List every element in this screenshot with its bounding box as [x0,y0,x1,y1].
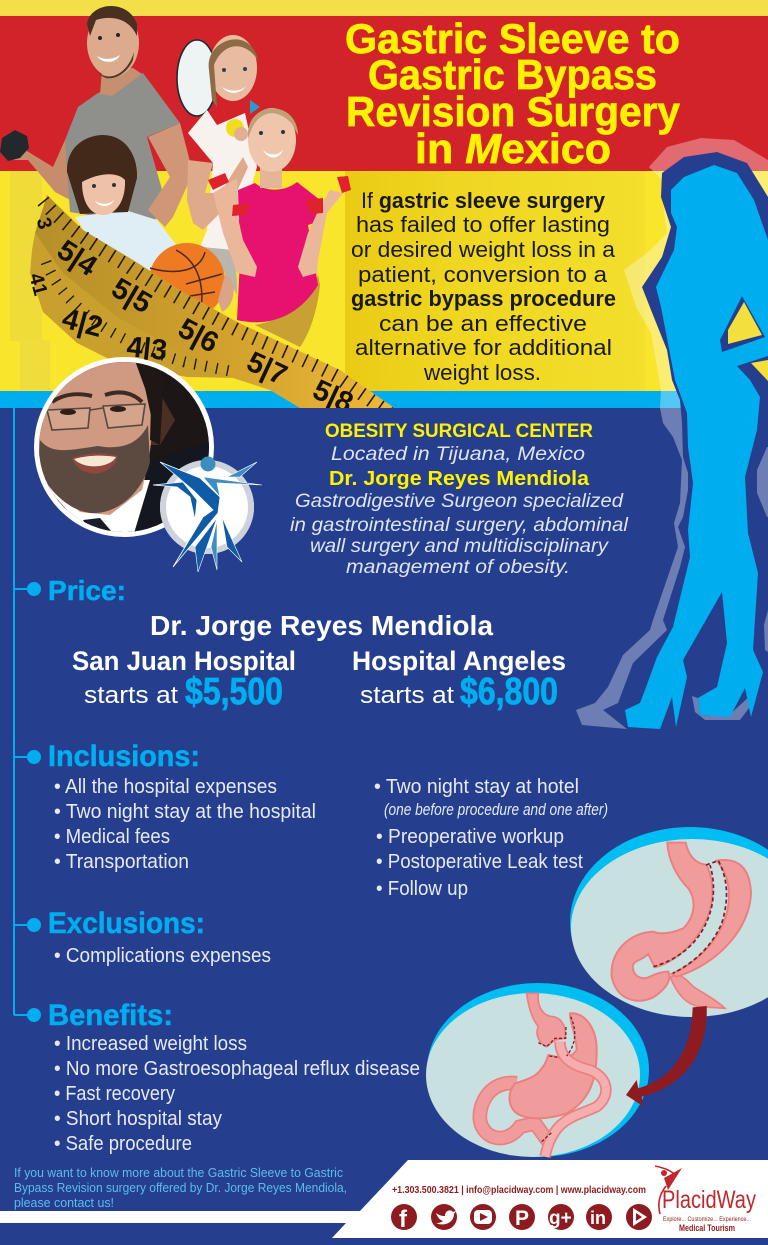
text block: contact prompt: Bypass Revision surgery offered by Dr. Jorge Reyes Mendiola, [14,1180,347,1195]
title: Gastric Bypass [368,51,657,98]
section: inclusions: • All the hospital expenses [54,776,277,798]
body text: intro paragraph: alternative for additional [355,335,612,360]
section: price: Price: [48,575,126,606]
section: benefits: • Short hospital stay [54,1108,222,1130]
section: price: $6,800 [460,671,558,713]
boy [66,135,176,272]
icons: social media [391,1204,652,1233]
section: benefits: • No more Gastroesophageal reflux disease [54,1058,420,1080]
section: inclusions: (one before procedure and one after) [384,800,608,819]
section: price: $5,500 [185,671,283,713]
icon: play [626,1204,652,1230]
illustration: woman silhouette [576,138,768,729]
section: benefits: • Safe procedure [54,1133,192,1155]
title: Revision Surgery [346,88,681,135]
icon: google plus: g+ [549,1208,572,1229]
icon: twitter [431,1204,457,1230]
text block: surgical center and surgeon: OBESITY SURGICAL CENTER [325,421,593,442]
body text: intro paragraph: If gastric sleeve surgery [361,188,606,213]
section: inclusions: Inclusions: [48,740,200,773]
tape lower band [30,234,233,378]
measuring tape: 5|4 [51,234,103,283]
body text: intro paragraph: weight loss. [423,360,541,385]
text block: surgical center and surgeon: wall surgery and multidisciplinary [310,536,610,557]
panel: white footer band [0,1160,768,1238]
text block: surgical center and surgeon: Dr. Jorge Reyes Mendiola [329,468,590,490]
timeline line [13,408,15,1016]
logo: PlacidWay [655,1166,756,1233]
illustration: gastric sleeve stomach [570,827,768,1017]
body text: intro paragraph: patient, conversion to a [358,262,608,287]
icon: linkedin: in [590,1208,606,1228]
text block: contact prompt [14,1165,347,1210]
title: in Mexico [415,125,611,172]
measuring tape: 4|3 [125,331,169,367]
section: price: Hospital Angeles [352,646,566,676]
icon: facebook: f [399,1206,408,1233]
man [0,6,193,227]
logo: PlacidWay: Explore... Customize... Experience... [663,1216,751,1223]
text block: contact prompt: If you want to know more about the Gastric Sleeve to Gastric [14,1165,343,1180]
silhouette shadow: right hip [692,447,768,720]
arrow: sleeve to bypass [626,1006,707,1106]
section: benefits: • Increased weight loss [54,1033,247,1055]
section: price: starts at [84,682,178,709]
section: inclusions: • Two night stay at hotel [374,776,579,798]
panel: navy background [0,408,768,1245]
section: price [14,575,566,713]
measuring tape: 5|6 [173,312,224,360]
logo: PlacidWay: Medical Tourism [679,1223,735,1233]
section: inclusions: • Follow up [376,878,468,900]
girl [208,108,351,322]
tape upper band [35,195,393,408]
text block: surgical center and surgeon: Gastrodigestive Surgeon specialized [295,491,625,512]
text: contact details: +1.303.500.3821 | info@placidway.com | www.placidway.com [392,1184,646,1196]
icon: linkedin [586,1204,612,1230]
icon: youtube [470,1204,496,1230]
doctor photo [34,357,214,537]
text block: surgical center and surgeon [290,421,629,578]
tape back band [255,275,320,347]
panel: cyan stripe [0,391,768,408]
silhouette outline [642,152,768,423]
icon: pinterest [509,1204,535,1230]
logo: obesity surgical center [153,456,262,572]
text block: surgical center and surgeon: in gastrointestinal surgery, abdominal [290,515,629,536]
illustration: family with measuring tape [0,6,393,420]
illustration: gastric bypass stomach [426,983,649,1157]
silhouette shadow [576,138,768,729]
section: inclusions: • Postoperative Leak test [376,851,583,873]
panel: yellow background [0,0,768,392]
section: benefits [14,999,420,1155]
section: price: starts at [360,682,454,709]
title [345,15,681,172]
section: benefits: Benefits: [48,999,173,1032]
section: inclusions: • Preoperative workup [376,826,564,848]
section: price: Dr. Jorge Reyes Mendiola [150,610,493,641]
body text: intro paragraph: or desired weight loss in a [351,237,616,262]
waist gap [751,360,768,381]
icon: basketball [150,243,234,312]
measuring tape: 3 [32,215,56,232]
body text: intro paragraph: gastric bypass procedure [351,286,616,311]
text block: surgical center and surgeon: management of obesity. [346,557,570,578]
title: Gastric Sleeve to [345,15,680,62]
section: benefits: • Fast recovery [54,1083,175,1105]
text block: contact prompt: please contact us! [14,1195,114,1210]
measuring tape: 41 [24,271,51,298]
silhouette body [625,165,768,729]
section: inclusions [14,740,608,900]
icon: facebook [391,1204,417,1233]
section: exclusions [14,907,271,967]
section: price: San Juan Hospital [72,646,296,676]
section: inclusions: • Transportation [54,851,189,873]
section: inclusions: • Medical fees [54,826,170,848]
measuring tape: 5|7 [242,346,292,392]
measuring tape: 4|2 [59,303,106,344]
icon: pinterest: P [515,1207,529,1230]
measuring tape [24,195,393,420]
arm gap [720,296,765,352]
panel: red title banner [0,16,768,171]
text block: surgical center and surgeon: Located in Tijuana, Mexico [331,444,585,465]
mother [177,35,260,295]
section: inclusions: • Two night stay at the hospital [54,801,316,823]
body text: intro paragraph: can be an effective [379,311,587,336]
measuring tape: 5|8 [308,374,358,420]
section: exclusions: • Complications expenses [54,945,271,967]
body text: intro paragraph: has failed to offer lasting [356,212,610,237]
measuring tape: 5|5 [106,272,157,320]
body text: intro paragraph [351,188,616,385]
section: exclusions: Exclusions: [48,907,205,940]
